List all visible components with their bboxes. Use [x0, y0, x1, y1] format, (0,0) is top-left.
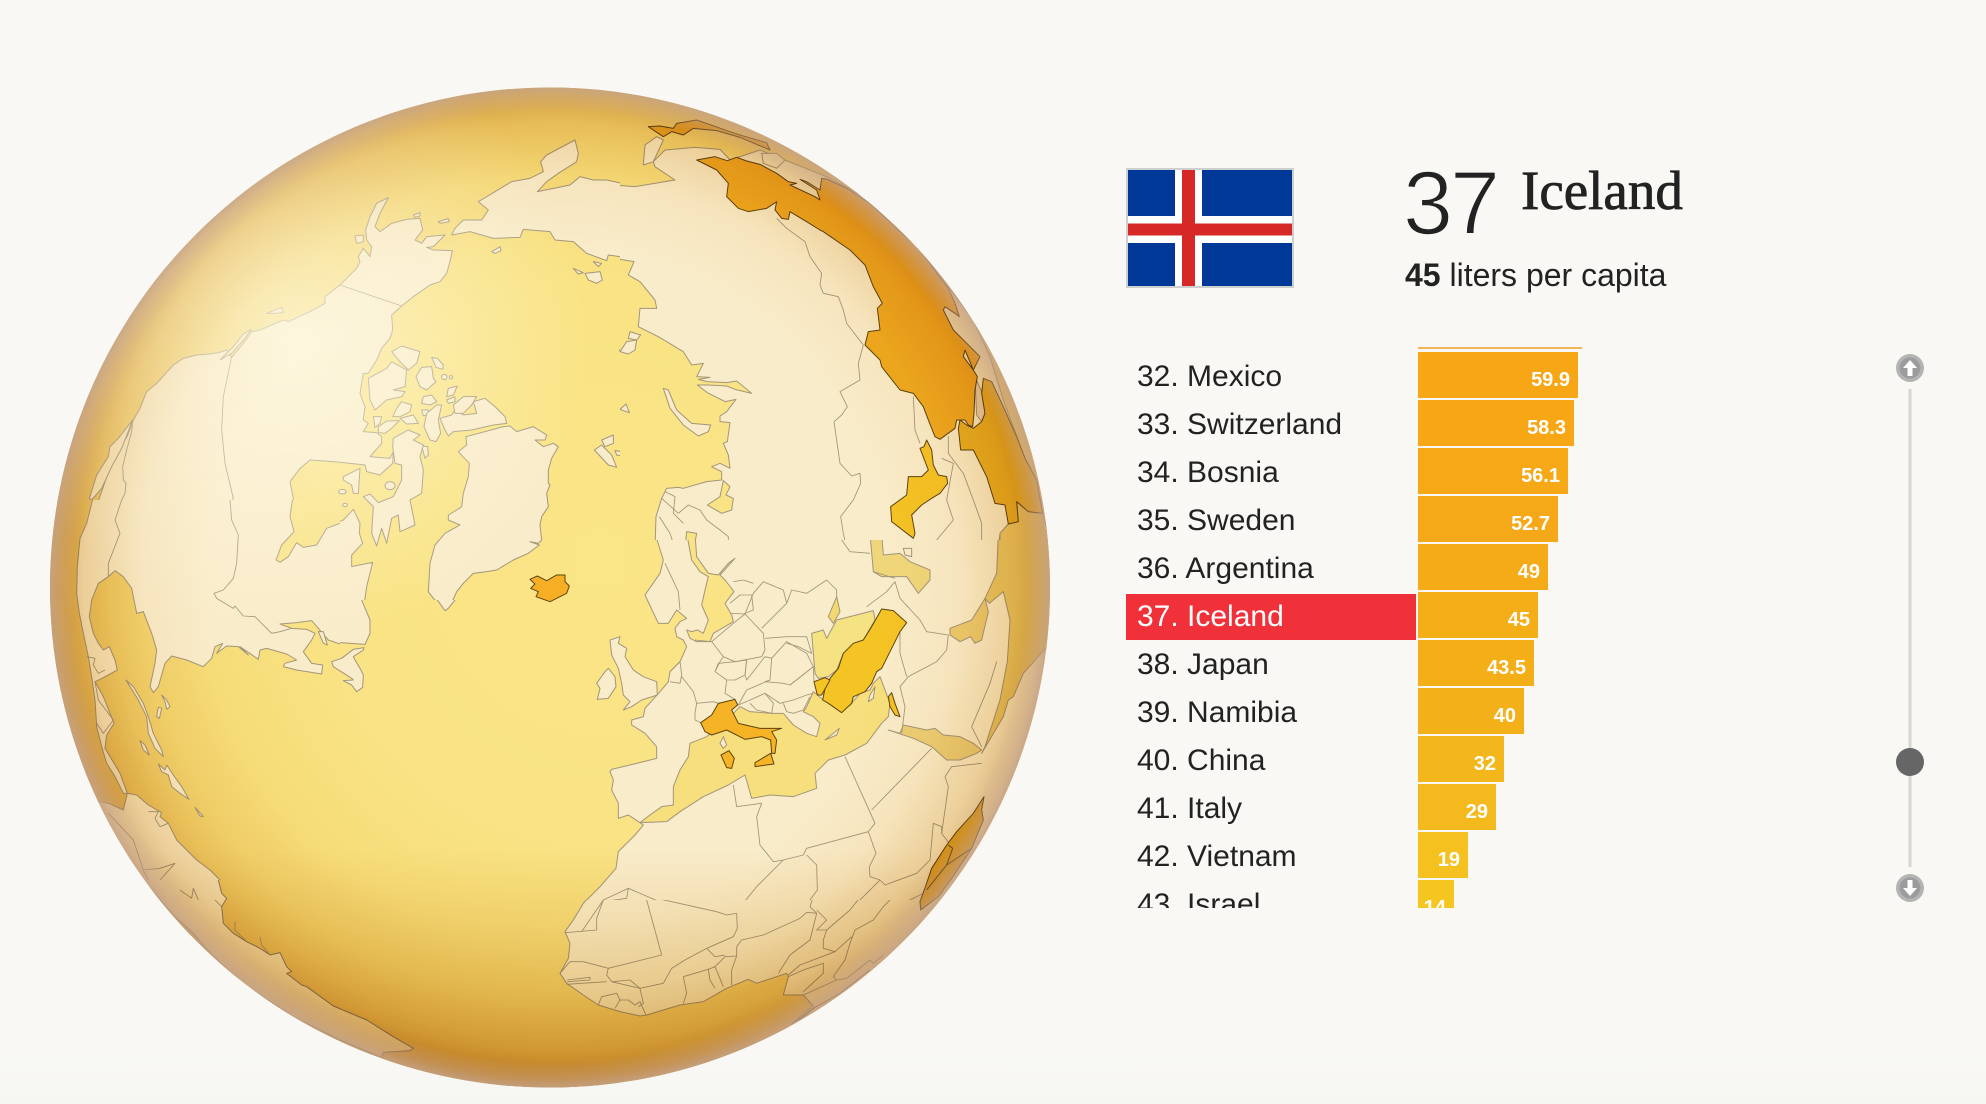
- sea: inland seas: [812, 611, 875, 678]
- row: Israel: [1137, 880, 1454, 926]
- land: north-west coast: [88, 352, 220, 500]
- row: Vietnam: [1137, 832, 1468, 878]
- flag of Iceland: [1126, 168, 1294, 288]
- scroll track: [1908, 389, 1912, 867]
- row: Israel: 43. Israel: [1137, 888, 1260, 921]
- limb darkening: [50, 88, 1050, 1088]
- row: Vietnam: 42. Vietnam: [1137, 840, 1297, 873]
- country: Sicily: [755, 753, 774, 767]
- row: China: [1137, 736, 1504, 782]
- row: Italy: 41. Italy: [1137, 792, 1242, 825]
- sea: Mediterranean: [640, 677, 890, 823]
- selected row highlight: [1126, 594, 1416, 640]
- highlighted countries: [530, 120, 1043, 1024]
- row: Israel: 14: [1424, 897, 1447, 919]
- globe: [50, 88, 1050, 1088]
- row: Sweden: 52.7: [1511, 513, 1550, 535]
- country borders: [603, 540, 997, 900]
- land: Greenland: [428, 426, 558, 610]
- rank number: 37: [1403, 154, 1497, 254]
- country: sliver at southern rim: [792, 1008, 813, 1024]
- land: Newfoundland: [332, 648, 364, 692]
- translucent rim: [50, 88, 1050, 1088]
- sea: Baltic: [687, 533, 735, 642]
- row: Namibia: [1137, 688, 1524, 734]
- liters per capita value: 45 liters per capita: [1405, 257, 1667, 293]
- country: South-east Africa: [920, 797, 984, 910]
- land: North America south and Caribbean: [76, 500, 340, 880]
- scroll up button: [1896, 354, 1924, 382]
- row: Sweden: 35. Sweden: [1137, 504, 1295, 537]
- land: southern South America: [144, 880, 414, 1058]
- row: Switzerland: [1137, 400, 1574, 446]
- row: Iceland: 37. Iceland: [1137, 600, 1284, 633]
- rank heading: [1403, 154, 1683, 254]
- row: Japan: 43.5: [1487, 657, 1526, 679]
- land: sub-Saharan Africa: [560, 900, 940, 1025]
- row: Namibia: 39. Namibia: [1137, 696, 1297, 729]
- country: Iceland: [530, 575, 569, 602]
- row: Sweden: [1137, 496, 1558, 542]
- row: Vietnam: 19: [1438, 849, 1460, 871]
- land: Baffin island: [363, 430, 423, 546]
- row: Japan: 38. Japan: [1137, 648, 1269, 681]
- row: Namibia: 40: [1494, 705, 1516, 727]
- country: small yellow east: [888, 693, 900, 717]
- land: British Isles: [610, 637, 657, 710]
- row: Switzerland: 33. Switzerland: [1137, 408, 1342, 441]
- row: Argentina: 36. Argentina: [1137, 552, 1314, 585]
- upper-left highlight: [70, 111, 552, 590]
- land: Russia and central Asia: [613, 137, 1053, 548]
- scrollbar: [1896, 354, 1924, 902]
- row: Bosnia: 56.1: [1521, 465, 1560, 487]
- ocean sphere: [50, 88, 1050, 1088]
- row: Mexico: 32. Mexico: [1137, 360, 1282, 393]
- country name: Iceland: [1521, 160, 1683, 221]
- row: Bosnia: [1137, 448, 1568, 494]
- scroll down button: [1896, 874, 1924, 902]
- country: Vietnam-shaped yellow region: [891, 440, 948, 538]
- country: Chukotka strip: [648, 120, 770, 150]
- country: large yellow region: [823, 609, 907, 713]
- land: Europe, Middle East and north Africa: [586, 540, 1050, 900]
- row: Bosnia: 34. Bosnia: [1137, 456, 1279, 489]
- country: Italy: [701, 699, 782, 753]
- row: Switzerland: 58.3: [1527, 417, 1566, 439]
- row: Iceland: 45: [1508, 609, 1530, 631]
- row: China: 40. China: [1137, 744, 1266, 777]
- row: Mexico: 59.9: [1531, 369, 1570, 391]
- country: Russia: [697, 157, 980, 439]
- country: Mongolia-area region: [958, 378, 1043, 524]
- row: Mexico: [1137, 352, 1578, 398]
- country: Sardinia: [721, 751, 734, 768]
- row: Argentina: 49: [1518, 561, 1540, 583]
- bottom page tone: [0, 1050, 1986, 1104]
- row: Italy: [1137, 784, 1496, 830]
- land masses: [77, 120, 1113, 1057]
- bottom shadow: [173, 872, 926, 1088]
- country: small yellow west: [814, 678, 830, 695]
- row: Iceland: [1137, 592, 1538, 638]
- row: Japan: [1137, 640, 1534, 686]
- land: north Siberia: [451, 140, 620, 262]
- land: Arctic, Canada, Greenland, north Russia: [220, 140, 620, 600]
- row: China: 32: [1474, 753, 1496, 775]
- row: Italy: 29: [1466, 801, 1488, 823]
- land: Labrador and Greenland tip: [340, 600, 456, 645]
- scroll handle: [1896, 748, 1924, 776]
- ranking list: [1126, 347, 1582, 926]
- top bar stub: [1418, 347, 1582, 349]
- row: Argentina: [1137, 544, 1548, 590]
